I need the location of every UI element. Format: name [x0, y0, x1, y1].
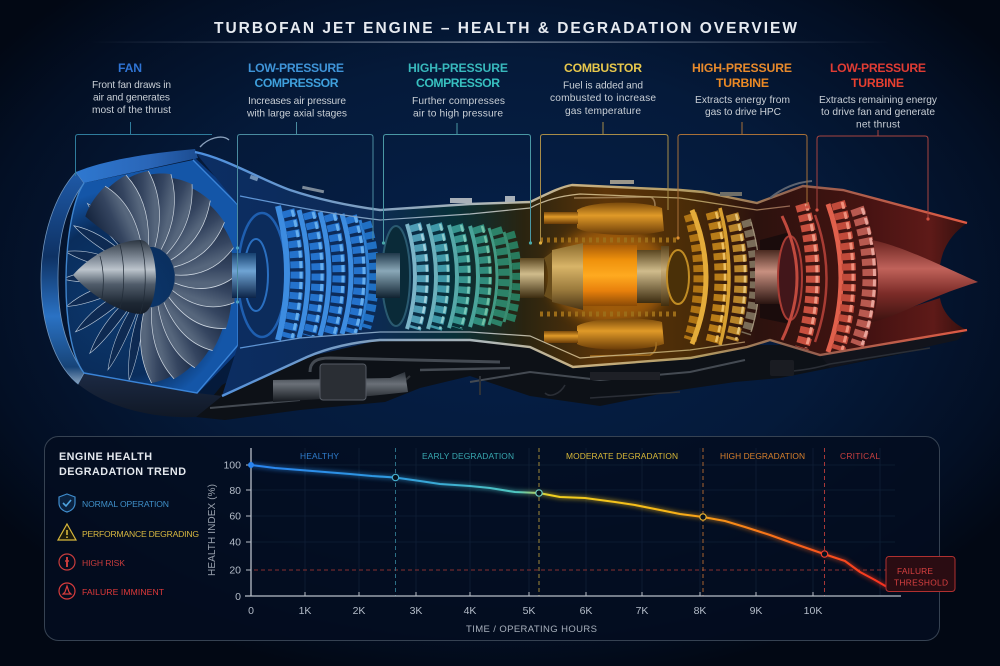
accessory mass below engine — [196, 335, 930, 420]
x axis tick labels: 3K — [410, 605, 422, 617]
combustor description — [550, 80, 656, 117]
bracket end dots — [236, 205, 930, 304]
bracket: high-pressure turbine — [678, 122, 807, 238]
fittings around burner — [540, 240, 680, 314]
x axis tick labels: 8K — [694, 605, 706, 617]
line chart — [207, 448, 901, 635]
x axis tick labels: 10K — [804, 605, 822, 617]
bracket: fan — [76, 122, 212, 176]
combustor description: Fuel is added and — [563, 80, 643, 92]
component label: low-pressure turbine: TURBINE — [851, 76, 904, 90]
inlet ring — [41, 172, 84, 384]
component label: low-pressure turbine: LOW-PRESSURE — [830, 61, 926, 75]
x axis tick labels: 5K — [523, 605, 535, 617]
component label: high-pressure compressor: COMPRESSOR — [416, 76, 500, 90]
LPT description: to drive fan and generate — [821, 107, 935, 118]
inner inlet line — [66, 183, 84, 373]
HPC description: air to high pressure — [413, 108, 503, 120]
low-pressure compressor — [232, 206, 374, 340]
fan description: most of the thrust — [92, 105, 171, 116]
x axis tick labels: 1K — [299, 605, 311, 617]
y axis tick labels: 0 — [235, 591, 241, 603]
upper cowl — [76, 149, 198, 183]
health curve — [251, 465, 887, 587]
component label: low-pressure compressor: COMPRESSOR — [254, 76, 339, 90]
LPT description: Extracts remaining energy — [819, 95, 938, 106]
fan case back — [193, 156, 240, 394]
lower cavity edge — [84, 160, 238, 393]
combustor — [520, 197, 680, 356]
y axis tick labels: 20 — [229, 564, 241, 576]
phase labels: EARLY DEGRADATION — [422, 451, 514, 461]
y axis tick labels: 80 — [229, 485, 241, 497]
phase labels — [300, 451, 880, 461]
HPC description: Further compresses — [412, 96, 505, 107]
component label: high-pressure turbine: TURBINE — [716, 76, 769, 90]
component label: high-pressure turbine: HIGH-PRESSURE — [692, 61, 792, 75]
upper fuel can — [544, 197, 664, 235]
engine cutaway illustration — [41, 137, 978, 420]
phase labels: CRITICAL — [840, 451, 880, 461]
icon: high risk — [59, 554, 75, 570]
tail cone — [872, 240, 978, 322]
callout: failure threshold: FAILURE — [897, 566, 933, 576]
component label: low-pressure turbine — [819, 61, 938, 130]
phase labels: HIGH DEGRADATION — [720, 451, 805, 461]
flanges — [200, 137, 812, 203]
lower fuel can — [544, 319, 664, 356]
x axis tick labels: 7K — [636, 605, 648, 617]
component label: low-pressure compressor — [246, 61, 347, 120]
curve markers — [249, 463, 828, 557]
callout: failure threshold: THRESHOLD — [894, 578, 948, 588]
phase labels: MODERATE DEGRADATION — [566, 451, 678, 461]
component label: high-pressure turbine — [692, 61, 792, 118]
component label: high-pressure compressor: HIGH-PRESSURE — [408, 61, 508, 75]
bracket: low-pressure turbine — [817, 130, 928, 219]
combustor glow — [548, 228, 672, 324]
HPT description: gas to drive HPC — [705, 107, 781, 118]
component label: combustor — [550, 61, 656, 117]
high-pressure compressor — [376, 224, 517, 329]
bracket: low-pressure compressor — [238, 122, 373, 302]
x axis tick labels: 6K — [580, 605, 592, 617]
callout: failure threshold — [886, 556, 955, 592]
curve glow — [251, 465, 887, 587]
fan description: Front fan draws in — [92, 80, 171, 91]
x axis tick labels: 9K — [750, 605, 762, 617]
LPC description: Increases air pressure — [248, 96, 346, 107]
legend text: high risk: HIGH RISK — [82, 558, 125, 568]
high-pressure turbine — [667, 208, 760, 345]
legend — [58, 494, 199, 599]
threshold line — [247, 569, 886, 571]
panel heading: DEGRADATION TREND — [59, 466, 186, 478]
component label: high-pressure compressor — [408, 61, 508, 120]
spinner — [73, 240, 156, 314]
LPC description: with large axial stages — [246, 108, 347, 120]
LPT description: net thrust — [856, 120, 900, 130]
legend text: degrading: PERFORMANCE DEGRADING — [82, 529, 199, 539]
fan section — [41, 149, 242, 417]
legend text: failure imminent: FAILURE IMMINENT — [82, 587, 165, 597]
legend text: normal: NORMAL OPERATION — [82, 499, 169, 509]
combustor description: combusted to increase — [550, 93, 656, 104]
icon: warning triangle — [58, 524, 76, 540]
HPT description — [695, 95, 790, 118]
y axis tick labels — [223, 460, 241, 603]
icon: failure imminent — [59, 583, 75, 599]
phase dividers — [396, 448, 824, 596]
fan description — [92, 80, 171, 116]
x axis tick labels: 0 — [248, 605, 254, 617]
health trend panel — [44, 436, 940, 640]
y axis title: HEALTH INDEX (%) — [207, 484, 218, 576]
panel heading — [59, 451, 186, 478]
fan cavity — [66, 160, 238, 393]
x axis title: TIME / OPERATING HOURS — [466, 624, 597, 635]
y axis tick labels: 100 — [223, 460, 241, 472]
low-pressure turbine — [755, 202, 874, 352]
title: TURBOFAN JET ENGINE – HEALTH & DEGRADATION OVERVIEW — [214, 20, 797, 37]
x axis tick labels — [248, 605, 822, 617]
x axis tick labels: 2K — [353, 605, 365, 617]
component label: fan — [92, 61, 171, 116]
panel heading: ENGINE HEALTH — [59, 451, 152, 463]
LPC description — [246, 96, 347, 120]
combustor description: gas temperature — [565, 106, 641, 117]
y axis tick labels: 60 — [229, 510, 241, 522]
component label: combustor: COMBUSTOR — [564, 61, 642, 75]
LPT description — [819, 95, 938, 130]
lower cowl — [78, 373, 222, 417]
y axis tick labels: 40 — [229, 536, 241, 548]
HPT description: Extracts energy from — [695, 95, 790, 106]
phase labels: HEALTHY — [300, 451, 339, 461]
bracket: combustor — [540, 122, 668, 243]
exhaust shells — [820, 190, 967, 368]
accessory pipes under engine — [210, 348, 930, 408]
outer casing lines — [195, 152, 967, 396]
engine body shell — [195, 152, 885, 396]
bracket: high-pressure compressor — [384, 123, 530, 243]
icon: shield — [59, 494, 75, 512]
x axis tick labels: 4K — [464, 605, 476, 617]
fan description: air and generates — [93, 92, 170, 104]
component label: fan: FAN — [118, 61, 142, 75]
component label: low-pressure compressor: LOW-PRESSURE — [248, 61, 344, 75]
HPC description — [412, 96, 505, 120]
axes — [245, 448, 901, 596]
fan blades — [63, 165, 242, 383]
